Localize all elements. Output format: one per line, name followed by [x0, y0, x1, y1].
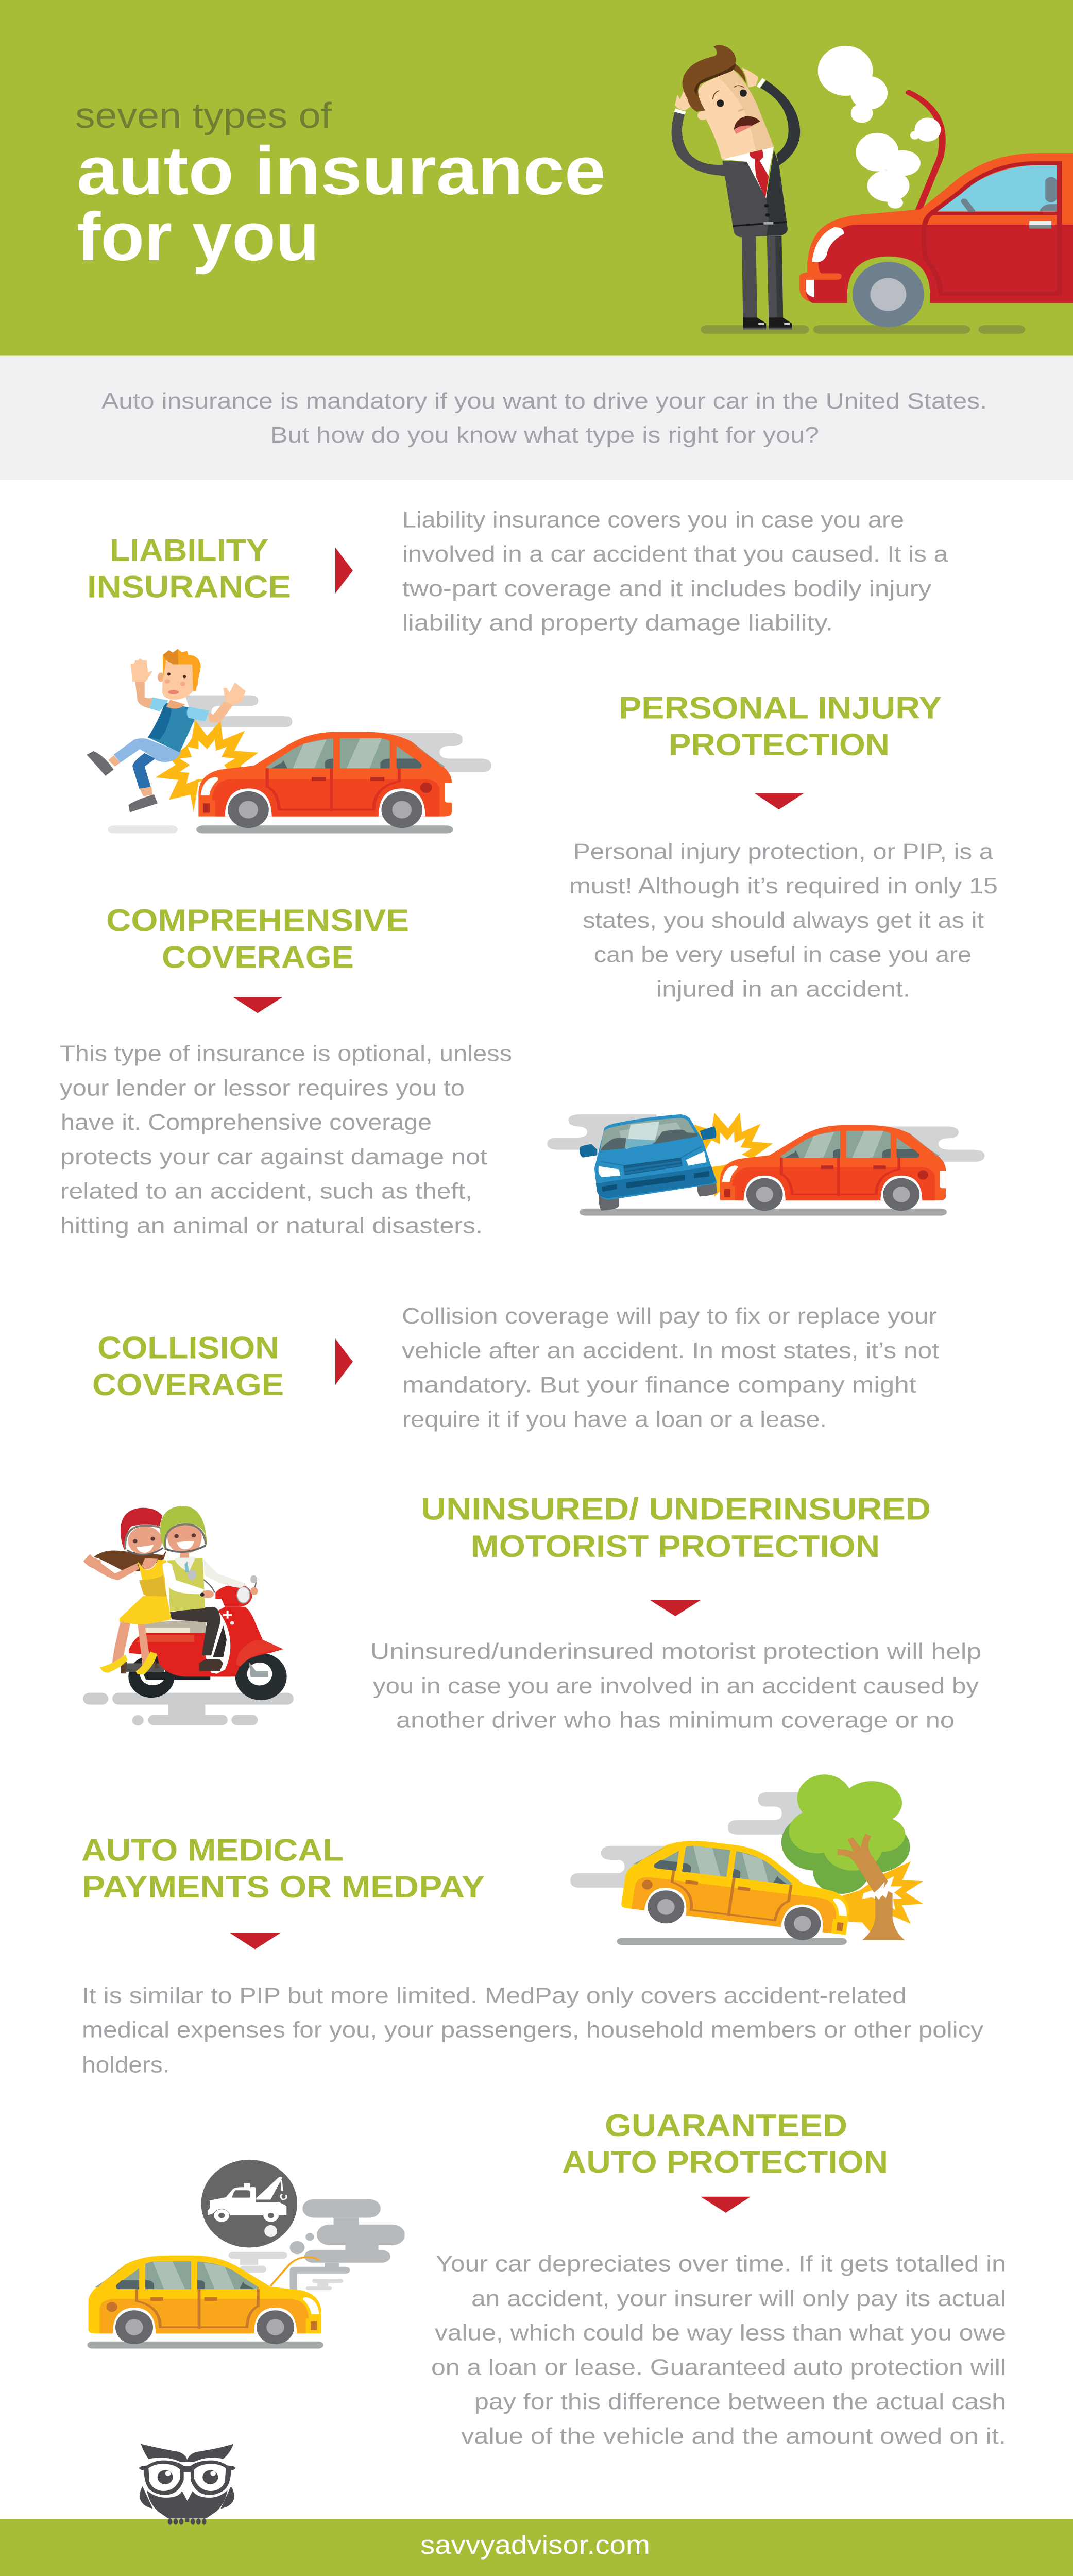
heading: PAYMENTS OR MEDPAY: [82, 1870, 485, 1904]
arrow: [701, 2197, 751, 2213]
text block: an accident, your insurer will only pay its actual: [471, 2285, 1006, 2311]
text block: value, which could be way less than what you owe: [435, 2320, 1006, 2345]
icon: impact burst: [156, 720, 258, 812]
text block: Uninsured/underinsured motorist protection will help: [370, 1638, 981, 1664]
text block: related to an accident, such as theft,: [60, 1178, 472, 1204]
heading: UNINSURED/ UNDERINSURED: [421, 1492, 931, 1527]
panel: collision coverage: [92, 1303, 939, 1432]
icon: ground shadow: [701, 325, 1025, 334]
text block: vehicle after an accident. In most states, it’s not: [402, 1337, 939, 1363]
text block: Collision coverage will pay to fix or replace your: [402, 1303, 937, 1329]
arrow: [230, 1933, 281, 1950]
icon: woman rider: [83, 1508, 172, 1674]
text block: holders.: [82, 2052, 169, 2077]
text block: This type of insurance is optional, unless: [60, 1041, 512, 1066]
arrow: [233, 997, 283, 1013]
title: seven types of: [75, 96, 332, 135]
heading: GUARANTEED: [605, 2108, 847, 2143]
text block: liability and property damage liability.: [402, 610, 833, 635]
text block: your lender or lessor requires you to: [60, 1075, 465, 1100]
illustration: two car collision: [547, 1112, 984, 1216]
text block: value of the vehicle and the amount owed on it.: [461, 2423, 1006, 2449]
heading: [87, 533, 291, 604]
text block: [370, 1638, 981, 1733]
icon: owl logo: [139, 2444, 235, 2525]
arrow: [335, 1338, 353, 1385]
text block: mandatory. But your finance company might: [402, 1371, 916, 1397]
panel: guaranteed auto protection: [431, 2108, 1006, 2449]
heading: [81, 1833, 485, 1904]
icon: smoke: [818, 46, 941, 209]
heading: COVERAGE: [92, 1368, 284, 1402]
text block: [402, 1303, 939, 1432]
text block: hitting an animal or natural disasters.: [60, 1212, 483, 1238]
text block: you in case you are involved in an accident caused by: [373, 1673, 979, 1699]
illustration: car hitting tree: [570, 1774, 923, 1945]
panel: liability insurance: [87, 506, 948, 635]
icon: tow truck badge and smoke: [87, 2160, 405, 2349]
icon: orange car: [720, 1125, 946, 1211]
icon: ground: [108, 825, 453, 834]
intro text: [101, 388, 987, 447]
icon: blue car with burst: [547, 1112, 984, 1216]
text block: require it if you have a loan or a lease.: [402, 1406, 827, 1432]
text block: injured in an accident.: [656, 976, 910, 1002]
illustration: broken down car with tow truck: [87, 2160, 405, 2349]
text block: another driver who has minimum coverage or no: [396, 1707, 955, 1733]
heading: PROTECTION: [669, 728, 890, 762]
icon: orange car: [198, 732, 452, 828]
heading: [106, 904, 409, 975]
text block: Personal injury protection, or PIP, is a: [573, 838, 993, 864]
text block: involved in a car accident that you caused. It is a: [402, 541, 948, 567]
heading: LIABILITY: [110, 533, 268, 568]
heading: AUTO PROTECTION: [562, 2145, 888, 2179]
heading: [92, 1331, 284, 1402]
icon: tree with burst: [570, 1774, 923, 1945]
panel: personal injury protection: [569, 691, 998, 1002]
title: for you: [77, 199, 319, 275]
arrow: [650, 1600, 701, 1616]
illustration: couple on scooter: [83, 1506, 294, 1725]
icon: falling person: [87, 649, 246, 812]
text block: have it. Comprehensive coverage: [61, 1109, 432, 1135]
icon: man rider: [160, 1506, 258, 1671]
text block: can be very useful in case you are: [594, 941, 972, 967]
title: [75, 96, 606, 275]
heading: PERSONAL INJURY: [619, 691, 942, 725]
icon: raised hood: [909, 93, 942, 210]
icon: worried man: [672, 45, 800, 330]
intro text: But how do you know what type is right for you?: [270, 422, 819, 447]
icon: yellow car: [89, 2256, 321, 2344]
illustration: man and broken down red car: [672, 45, 1073, 334]
heading: COMPREHENSIVE: [106, 904, 409, 938]
text block: on a loan or lease. Guaranteed auto protection will: [431, 2354, 1006, 2380]
illustration: pedestrian hit by car: [87, 649, 491, 834]
text block: [82, 1982, 983, 2077]
text block: [569, 838, 998, 1002]
icon: scooter: [126, 1575, 287, 1700]
text block: medical expenses for you, your passengers, household members or other policy: [82, 2017, 983, 2042]
text block: [402, 506, 948, 635]
panel: header: [0, 0, 1073, 356]
panel: comprehensive coverage: [60, 904, 512, 1238]
intro text: Auto insurance is mandatory if you want to drive your car in the United States.: [101, 388, 987, 413]
text block: Your car depreciates over time. If it gets totalled in: [436, 2250, 1006, 2276]
text block: must! Although it’s required in only 15: [569, 873, 998, 899]
heading: COLLISION: [97, 1331, 279, 1365]
heading: INSURANCE: [87, 570, 291, 604]
arrow: [335, 548, 353, 593]
title: auto insurance: [77, 133, 606, 209]
panel: uninsured underinsured motorist protection: [370, 1492, 981, 1733]
icon: yellow car: [619, 1833, 857, 1945]
heading: [619, 691, 942, 762]
text block: two-part coverage and it includes bodily injury: [402, 575, 931, 601]
heading: [421, 1492, 931, 1564]
text block: It is similar to PIP but more limited. MedPay only covers accident-related: [82, 1982, 907, 2008]
heading: AUTO MEDICAL: [81, 1833, 344, 1868]
text block: [431, 2250, 1006, 2449]
icon: ground shadow: [83, 1693, 294, 1725]
heading: [562, 2108, 888, 2179]
text block: protects your car against damage not: [60, 1144, 487, 1169]
icon: red car: [799, 153, 1073, 327]
heading: MOTORIST PROTECTION: [471, 1529, 880, 1564]
footer text: savvyadvisor.com: [420, 2530, 650, 2560]
panel: auto medical payments: [81, 1833, 983, 2077]
text block: [60, 1041, 512, 1238]
text block: pay for this difference between the actual cash: [474, 2388, 1006, 2414]
heading: COVERAGE: [162, 940, 354, 975]
icon: speed lines: [185, 696, 491, 772]
text block: Liability insurance covers you in case you are: [402, 506, 904, 532]
panel: footer: [0, 2519, 1073, 2576]
panel: intro: [0, 356, 1073, 480]
text block: states, you should always get it as it: [583, 907, 984, 933]
arrow: [754, 793, 804, 809]
